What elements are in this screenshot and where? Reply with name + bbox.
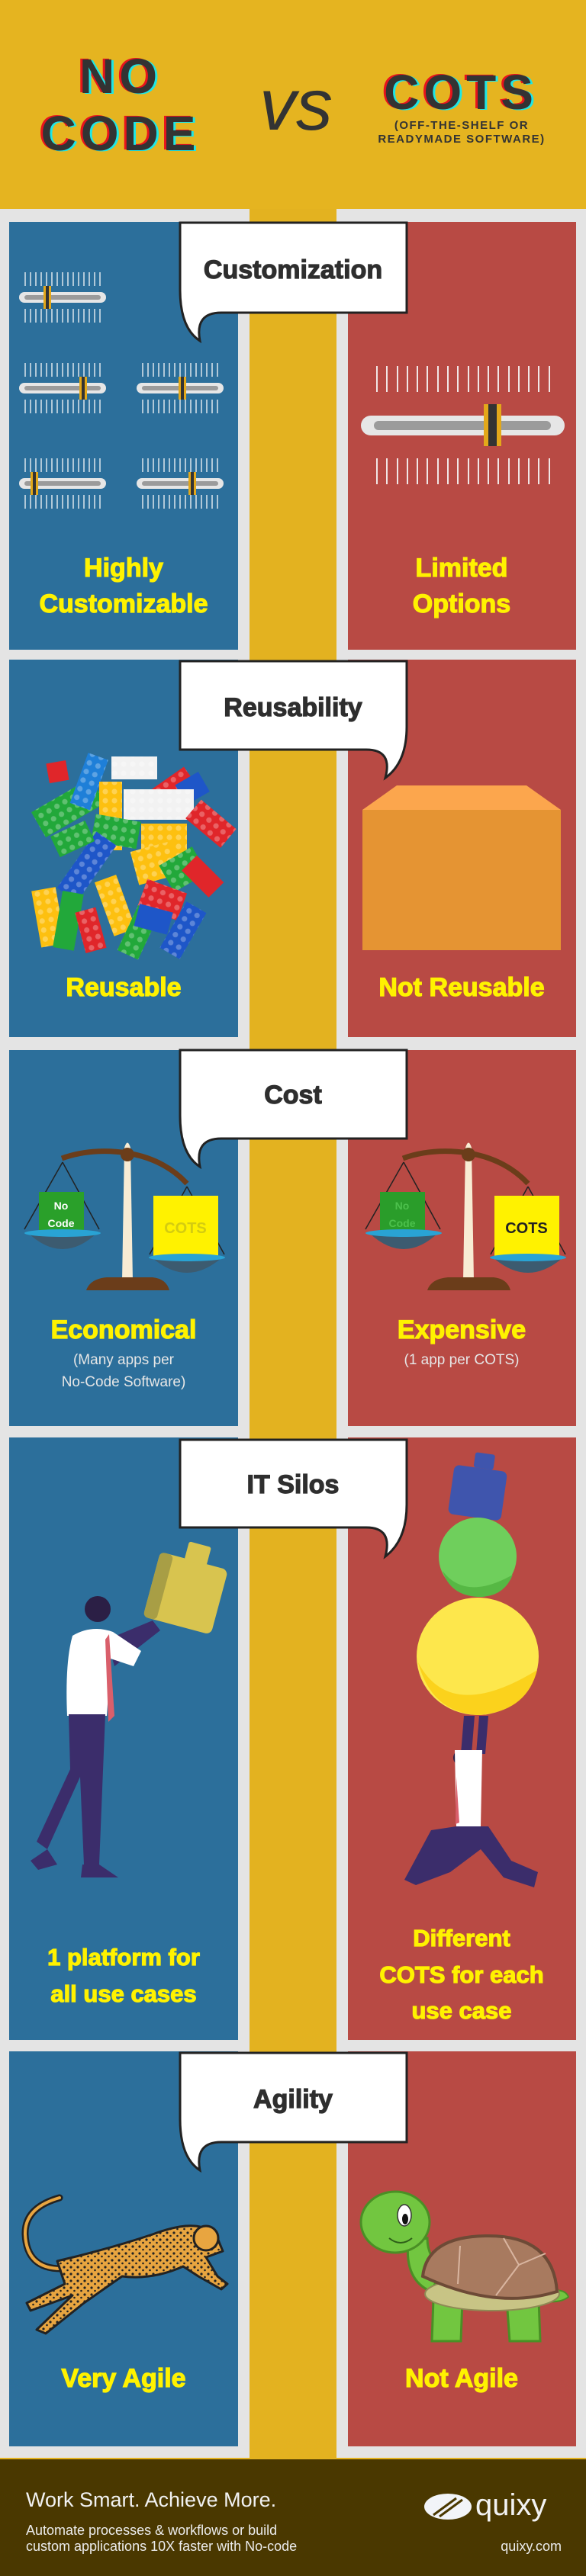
panel: reusability cots [348,660,576,1037]
icon: balance scale no-code [24,1142,225,1290]
label: Reusable: Reusable [66,973,182,1002]
callout: Customization: Customization [204,255,382,284]
icon: balance scale cots [365,1142,566,1290]
label: Expensive [398,1315,526,1368]
label: Limited Options: Limited [416,554,507,583]
label: Limited Options [413,554,510,618]
label: Expensive: (1 app per COTS) [404,1352,519,1368]
label: Economical: No-Code Software) [62,1374,185,1390]
icon: balance scale no-code: COTS [164,1220,207,1237]
panel: cost cots [348,1050,576,1426]
title: COTS: COTS [386,66,540,120]
label: Highly Customizable [39,554,208,618]
label: Highly Customizable: Highly [84,554,163,583]
title: NO CODE: CODE [41,106,200,161]
label: 1 platform for all use cases [47,1944,200,2007]
header background [0,0,586,209]
label: Different COTS for each use case: COTS for each [379,1961,544,1988]
icon: balance scale cots: Code [389,1217,416,1229]
callout: Customization [180,223,407,341]
icon: balance scale no-code: No [54,1200,68,1212]
label: Economical: (Many apps per [73,1352,175,1368]
callout: IT Silos [180,1440,407,1556]
icon: lego bricks [31,753,237,960]
panel: agility no-code [9,2051,238,2446]
label: Expensive: Expensive [398,1315,526,1344]
logo: quixy [424,2488,562,2554]
vs script: vs [259,64,333,146]
footer tagline: custom applications 10X faster with No-code [26,2539,297,2554]
callout: Agility: Agility [253,2085,333,2114]
label: Highly Customizable: Customizable [39,589,208,618]
icon: balance scale cots: No [395,1200,409,1212]
label: Very Agile: Very Agile [61,2364,186,2393]
label: Not Reusable: Not Reusable [378,973,545,1002]
title: COTS: READYMADE SOFTWARE) [378,133,546,146]
callout: IT Silos: IT Silos [247,1470,339,1499]
panel: agility cots [348,2051,576,2446]
title: COTS: COTS [384,65,538,120]
icon: person holding stacked weights [404,1450,539,1887]
label: Not Agile: Not Agile [405,2364,518,2393]
title: NO CODE [39,48,202,162]
panel: customization cots [348,222,576,650]
icon: closed box [362,785,561,950]
logo: quixy: quixy.com [501,2539,562,2554]
label: Economical: Economical [51,1315,196,1344]
icon: big slider [361,366,565,484]
footer tagline: Automate processes & workflows or build [26,2523,277,2538]
logo: quixy: quixy [475,2488,546,2522]
title: NO CODE: NO [79,49,162,104]
icon: turtle [361,2192,568,2341]
callout: Reusability [180,661,407,778]
title: NO CODE: NO [77,48,159,103]
panel: reusability no-code [9,660,238,1037]
label: Different COTS for each use case: use case [412,1997,511,2024]
panel: IT silos cots [348,1437,576,2040]
label: 1 platform for all use cases: all use cases [50,1980,197,2007]
label: Different COTS for each use case: Different [413,1925,510,1951]
callout: Cost: Cost [264,1081,322,1110]
icon: small sliders [19,272,224,509]
label: Economical [51,1315,196,1390]
icon: man lifting one weight [31,1535,233,1877]
panel: cost no-code [9,1050,238,1426]
footer tagline [26,2488,297,2554]
icon: balance scale cots: COTS [505,1220,548,1237]
footer tagline: Work Smart. Achieve More. [26,2488,276,2511]
callout: Agility [180,2053,407,2170]
icon: balance scale no-code: Code [47,1217,75,1229]
central yellow strip [250,209,336,2459]
callout: Reusability: Reusability [224,693,362,722]
panel: IT silos no-code [9,1437,238,2040]
title: COTS: (OFF-THE-SHELF OR [394,119,529,132]
icon: cheetah [25,2198,227,2333]
callout: Cost [180,1050,407,1167]
footer [0,2458,586,2576]
label: Limited Options: Options [413,589,510,618]
title: NO CODE: CODE [43,107,202,162]
title: COTS [378,64,546,146]
label: Different COTS for each use case [379,1925,544,2024]
title: COTS: COTS [382,64,536,119]
title: NO CODE: NO [82,50,164,104]
label: 1 platform for all use cases: 1 platform for [47,1944,200,1971]
panel: customization no-code [9,222,238,650]
title: NO CODE: CODE [39,105,198,160]
